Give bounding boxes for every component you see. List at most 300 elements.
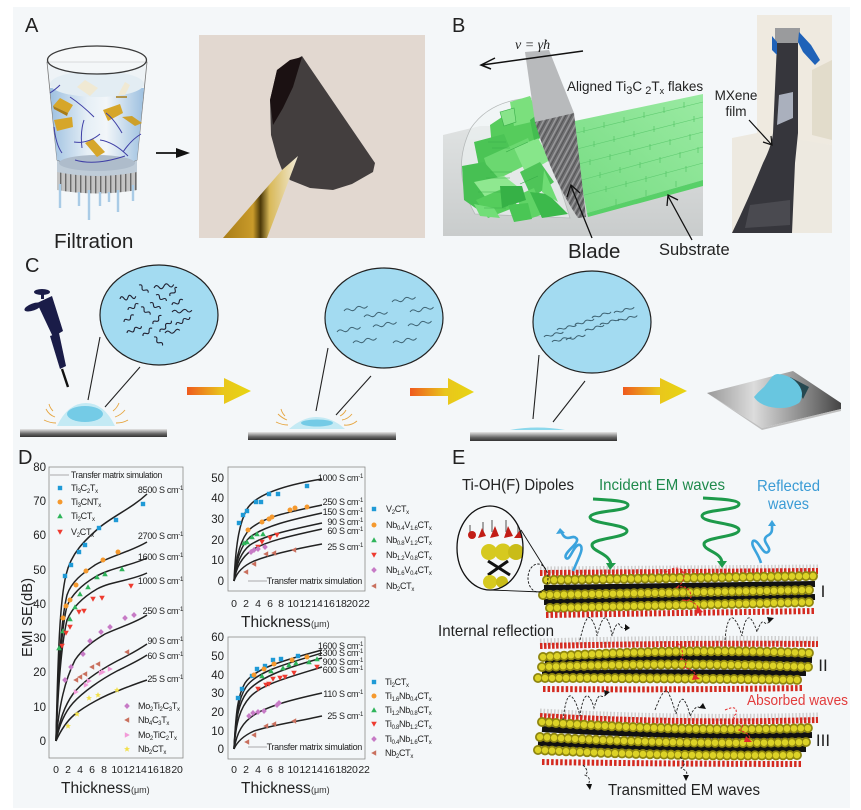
- y axis ticks: 20: [211, 707, 224, 719]
- legend: x: [429, 711, 432, 717]
- legend: V: [404, 535, 410, 545]
- legend: 0.8: [392, 725, 400, 731]
- blue reflected wave left: [556, 528, 582, 571]
- legend: 1.6: [410, 740, 418, 746]
- green substrate sheet: [570, 94, 703, 217]
- label: aligned flakes: x: [660, 86, 665, 96]
- legend: 0.4: [410, 697, 418, 703]
- y axis ticks: 50: [211, 651, 224, 663]
- legend: Ti: [385, 705, 392, 715]
- y axis ticks: [211, 632, 224, 756]
- curve labels: 8500 S cm: [138, 485, 178, 495]
- legend: 0.4: [410, 571, 418, 577]
- legend bottom: x: [177, 707, 180, 713]
- arrow 3: [623, 378, 687, 404]
- legend: 1.2: [397, 556, 405, 562]
- legend top: CT: [80, 527, 92, 537]
- chart: EMI SE vs thickness 2: [211, 467, 432, 631]
- chart: EMI SE vs thickness 1: [19, 462, 184, 797]
- legend bottom: C: [163, 701, 170, 711]
- label: internal reflection: Internal reflection: [438, 623, 554, 640]
- curve labels: -1: [178, 652, 184, 658]
- curve labels: 250 S cm: [323, 497, 358, 507]
- legend top: 2: [77, 533, 81, 539]
- x axis ticks: 14: [311, 764, 323, 776]
- curve labels: -1: [358, 649, 364, 655]
- x axis ticks: 2: [65, 764, 71, 776]
- label: absorbed waves: Absorbed waves: [747, 693, 848, 709]
- layer numerals: I: [821, 582, 825, 601]
- x axis ticks: 2: [243, 598, 249, 610]
- substrate and droplet 2: [248, 348, 396, 440]
- curve labels: -1: [178, 675, 184, 681]
- legend: 2: [392, 510, 396, 516]
- photo: MXene film roll: [732, 15, 832, 233]
- legend: x: [406, 510, 409, 516]
- blade: [525, 50, 574, 122]
- x axis ticks: 16: [323, 598, 335, 610]
- legend bottom: 2: [150, 736, 154, 742]
- x axis ticks: 20: [346, 764, 358, 776]
- x axis ticks: 4: [255, 764, 261, 776]
- legend bottom: 2: [149, 750, 153, 756]
- legend: 1.6: [410, 526, 418, 532]
- legend top: x: [95, 489, 98, 495]
- legend top: Transfer matrix simulation: [71, 470, 162, 480]
- y axis ticks: 50: [211, 473, 224, 485]
- diagram: blade coating: [443, 38, 703, 236]
- transmitted wave arrows: [583, 757, 689, 790]
- curve labels: [138, 485, 184, 684]
- legend: CT: [399, 748, 411, 758]
- curve labels: -1: [358, 690, 364, 696]
- curve labels: -1: [358, 658, 364, 664]
- legend top: CT: [81, 511, 93, 521]
- legend top: CNT: [81, 497, 99, 507]
- label: Substrate with arrow: [659, 195, 730, 259]
- curve labels: 25 S cm: [327, 542, 358, 552]
- curve labels: -1: [358, 543, 364, 549]
- magnified circle 1: [100, 265, 218, 365]
- data markers: [56, 502, 145, 729]
- x axis title: Thickness: [241, 614, 311, 631]
- green incident wave 1: [590, 499, 628, 570]
- legend: 1.2: [410, 725, 418, 731]
- legend: x: [429, 556, 432, 562]
- legend: 1.6: [392, 697, 400, 703]
- legend top: x: [92, 517, 95, 523]
- legend: 0.4: [392, 740, 400, 746]
- green flakes: [462, 96, 568, 222]
- x axis ticks: 12: [123, 764, 135, 776]
- curve labels: -1: [358, 518, 364, 524]
- green incident wave 2: [702, 498, 739, 568]
- curve labels: -1: [178, 532, 184, 538]
- curve labels: 1000 S cm: [318, 473, 358, 483]
- legend: Nb: [399, 705, 410, 715]
- legend: x: [429, 541, 432, 547]
- legend: x: [406, 683, 409, 689]
- x axis ticks: 2: [243, 764, 249, 776]
- legend: Ti: [385, 691, 392, 701]
- legend top: C: [81, 483, 88, 493]
- y axis ticks: 40: [211, 670, 224, 682]
- label: MXene film: film: [726, 104, 746, 119]
- label: reflected waves: [757, 478, 820, 513]
- legend: Nb: [399, 691, 410, 701]
- curve labels: 150 S cm: [323, 507, 358, 517]
- label: aligned flakes: flakes: [664, 79, 703, 94]
- x axis ticks: 4: [77, 764, 83, 776]
- magnified dipoles: [457, 506, 524, 590]
- legend: 0.8: [410, 556, 418, 562]
- legend: CT: [417, 734, 430, 744]
- legend: CT: [418, 550, 430, 560]
- legend: [371, 677, 432, 760]
- y axis ticks: 30: [33, 633, 46, 645]
- x axis ticks: 22: [358, 598, 370, 610]
- legend bottom: CT: [152, 744, 164, 754]
- panel: D charts: [18, 447, 432, 797]
- x axis ticks: 18: [335, 598, 347, 610]
- legend: Nb: [399, 734, 410, 744]
- legend: 0.8: [410, 711, 418, 717]
- legend top: 3: [78, 503, 82, 509]
- heading: A: A: [25, 15, 39, 37]
- heading: E: E: [452, 447, 465, 469]
- legend: CT: [418, 535, 430, 545]
- label: aligned flakes: T: [651, 79, 660, 94]
- legend: 0.4: [397, 526, 405, 532]
- legend: x: [429, 740, 432, 746]
- curve labels: 2700 S cm: [138, 531, 178, 541]
- legend: 2: [397, 587, 401, 593]
- legend: x: [429, 697, 432, 703]
- label: reflected waves: Reflected: [757, 478, 820, 495]
- legend: CT: [418, 520, 430, 530]
- legend: Nb: [385, 748, 396, 758]
- curve labels: 90 S cm: [147, 636, 178, 646]
- legend top: 3: [78, 489, 82, 495]
- legend: CT: [395, 677, 407, 687]
- y axis ticks: 40: [33, 599, 46, 611]
- layer numerals: II: [818, 656, 828, 675]
- curve labels: 25 S cm: [147, 674, 178, 684]
- glass dome: [461, 98, 570, 218]
- curves: [234, 650, 322, 749]
- legend top: 2: [87, 489, 91, 495]
- x axis ticks: [231, 598, 370, 610]
- panel: C drop casting: [20, 255, 841, 441]
- substrate and droplet 1: [20, 337, 167, 437]
- curve labels: 250 S cm: [143, 606, 178, 616]
- x axis title: (μm): [311, 619, 330, 629]
- curve labels: [248, 641, 364, 752]
- x axis ticks: 0: [231, 598, 237, 610]
- legend bottom: Nb: [138, 715, 149, 725]
- curve labels: Transfer matrix simulation: [267, 742, 362, 752]
- label: transmitted waves: Transmitted EM waves: [608, 782, 760, 799]
- legend: Nb: [386, 565, 397, 575]
- legend bottom: C: [152, 715, 159, 725]
- x axis ticks: 6: [267, 764, 273, 776]
- legend: x: [429, 725, 432, 731]
- y axis ticks: [33, 462, 46, 748]
- legend: 0.8: [397, 541, 405, 547]
- legend: Nb: [399, 719, 410, 729]
- x axis ticks: 8: [278, 598, 284, 610]
- legend top: Ti: [71, 511, 78, 521]
- y axis ticks: 10: [33, 702, 46, 714]
- dashed origin circle and callout lines: [490, 530, 548, 592]
- x axis ticks: 10: [287, 764, 299, 776]
- x axis ticks: 0: [53, 764, 59, 776]
- legend bottom: 2: [150, 707, 154, 713]
- panel: B blade coating: [443, 15, 832, 263]
- legend: V: [404, 520, 410, 530]
- legend bottom: TiC: [153, 730, 167, 740]
- heading: D: D: [18, 447, 32, 469]
- arrow 1: [187, 378, 251, 404]
- x axis ticks: 14: [311, 598, 323, 610]
- y axis ticks: 10: [211, 726, 224, 738]
- equation: v = γ̇h: [515, 38, 550, 53]
- legend: Nb: [386, 550, 397, 560]
- layer numerals: III: [816, 731, 830, 750]
- curve labels: [248, 473, 364, 586]
- arrow: blade velocity: [481, 51, 583, 69]
- legend: V: [386, 504, 392, 514]
- heading: B: B: [452, 15, 465, 37]
- x axis ticks: 8: [278, 764, 284, 776]
- x axis title: (μm): [311, 785, 330, 795]
- x axis ticks: 0: [231, 764, 237, 776]
- curve labels: 600 S cm: [323, 665, 358, 675]
- substrate and thin film: [470, 355, 617, 441]
- layer I: [540, 568, 818, 615]
- x axis ticks: [53, 764, 183, 776]
- dashed internal reflection waves: [563, 617, 774, 720]
- curve labels: 60 S cm: [327, 526, 358, 536]
- x axis title: Thickness: [61, 780, 131, 797]
- legend: 1.2: [392, 711, 400, 717]
- curve labels: -1: [358, 498, 364, 504]
- x axis ticks: 12: [299, 764, 311, 776]
- y axis ticks: 30: [211, 514, 224, 526]
- curve labels: 900 S cm: [323, 657, 358, 667]
- x axis ticks: 18: [335, 764, 347, 776]
- legend: Ti: [385, 719, 392, 729]
- curve labels: -1: [358, 527, 364, 533]
- label: incident waves: Incident EM waves: [599, 477, 725, 494]
- x axis ticks: 6: [89, 764, 95, 776]
- x axis ticks: 14: [135, 764, 147, 776]
- curves: [56, 494, 147, 741]
- label: Substrate with arrow: Substrate: [659, 241, 730, 259]
- icon: film on plate: [707, 371, 841, 430]
- legend bottom: [124, 701, 180, 756]
- curves: [234, 479, 322, 581]
- x axis ticks: 18: [159, 764, 171, 776]
- x axis title: Thickness: [241, 780, 311, 797]
- icon: filtration beaker: [47, 46, 147, 220]
- label: reflected waves: waves: [767, 496, 809, 513]
- legend bottom: T: [161, 715, 167, 725]
- curve labels: -1: [178, 577, 184, 583]
- layer III: [538, 712, 818, 764]
- legend: 2: [396, 754, 400, 760]
- legend bottom: Ti: [153, 701, 160, 711]
- legend: CT: [417, 719, 430, 729]
- legend top: Ti: [71, 483, 78, 493]
- legend: Nb: [386, 581, 397, 591]
- legend top: x: [98, 503, 101, 509]
- panel: E shielding mechanism: [438, 447, 848, 799]
- curve labels: 1300 S cm: [318, 648, 358, 658]
- x axis ticks: 10: [111, 764, 123, 776]
- legend bottom: Mo: [138, 701, 150, 711]
- legend: Nb: [386, 535, 397, 545]
- x axis ticks: 20: [171, 764, 183, 776]
- x axis ticks: 20: [346, 598, 358, 610]
- legend: Nb: [386, 520, 397, 530]
- legend top: T: [90, 483, 96, 493]
- x axis ticks: 6: [267, 598, 273, 610]
- legend bottom: 3: [169, 707, 173, 713]
- x axis ticks: 10: [287, 598, 299, 610]
- legend bottom: 3: [158, 721, 162, 727]
- legend: 1.2: [410, 541, 418, 547]
- legend top: [50, 470, 162, 539]
- legend: CT: [418, 565, 430, 575]
- legend top: x: [91, 533, 94, 539]
- label: Blade with arrow: [567, 185, 620, 263]
- chart: EMI SE vs thickness 3: [211, 632, 432, 797]
- legend top: 2: [78, 517, 82, 523]
- curve labels: -1: [358, 712, 364, 718]
- x axis ticks: 16: [323, 764, 335, 776]
- curve labels: 60 S cm: [147, 651, 178, 661]
- curve labels: 90 S cm: [327, 517, 358, 527]
- legend bottom: 4: [149, 721, 153, 727]
- legend bottom: 2: [166, 736, 170, 742]
- x axis ticks: 4: [255, 598, 261, 610]
- legend: CT: [400, 581, 412, 591]
- y axis ticks: 0: [218, 576, 224, 588]
- arrow: beaker to film: [156, 148, 190, 158]
- legend top: Ti: [71, 497, 78, 507]
- magnified circle 3: [533, 271, 651, 373]
- curve labels: 1000 S cm: [138, 576, 178, 586]
- icon: pipette: [23, 289, 68, 387]
- x axis ticks: [231, 764, 370, 776]
- legend bottom: x: [166, 721, 169, 727]
- label: Blade with arrow: Blade: [568, 240, 620, 263]
- label: MXene film: MXene: [715, 88, 757, 103]
- legend bottom: 2: [160, 707, 164, 713]
- y axis ticks: 0: [218, 744, 224, 756]
- y axis ticks: 70: [33, 496, 46, 508]
- curve labels: -1: [178, 637, 184, 643]
- curve labels: -1: [358, 666, 364, 672]
- caption: Filtration: Filtration: [54, 230, 133, 253]
- legend: x: [429, 526, 432, 532]
- y axis ticks: 80: [33, 462, 46, 474]
- layer II: [538, 639, 818, 689]
- label: aligned flakes: Aligned Ti: [567, 79, 626, 94]
- y axis ticks: 60: [211, 632, 224, 644]
- legend top: V: [71, 527, 77, 537]
- curve labels: -1: [358, 474, 364, 480]
- legend bottom: Nb: [138, 744, 149, 754]
- label: dipoles: Ti-OH(F) Dipoles: [462, 477, 574, 494]
- legend: [371, 504, 432, 593]
- legend: V: [404, 565, 410, 575]
- x axis ticks: 16: [147, 764, 159, 776]
- legend bottom: Mo: [138, 730, 150, 740]
- legend: CT: [417, 705, 430, 715]
- y axis ticks: 0: [40, 736, 46, 748]
- legend bottom: x: [174, 736, 177, 742]
- y axis ticks: [211, 473, 224, 588]
- label: aligned flakes: C: [632, 79, 642, 94]
- legend: CT: [417, 691, 430, 701]
- y axis ticks: 20: [33, 667, 46, 679]
- legend: V: [404, 550, 410, 560]
- y axis ticks: 30: [211, 688, 224, 700]
- curve labels: 1600 S cm: [138, 552, 178, 562]
- legend: Ti: [385, 734, 392, 744]
- legend bottom: T: [172, 701, 178, 711]
- curve labels: 110 S cm: [323, 689, 358, 699]
- arrow 2: [410, 378, 474, 405]
- curve labels: -1: [178, 607, 184, 613]
- legend bottom: x: [163, 750, 166, 756]
- curve labels: -1: [358, 642, 364, 648]
- x axis ticks: 22: [358, 764, 370, 776]
- x axis ticks: 12: [299, 598, 311, 610]
- label: aligned flakes: 2: [642, 85, 651, 97]
- y axis ticks: 40: [211, 493, 224, 505]
- data markers: [236, 654, 320, 745]
- x axis title: (μm): [131, 785, 150, 795]
- data markers: [237, 484, 310, 575]
- legend bottom: T: [169, 730, 175, 740]
- magnified circle 2: [325, 268, 443, 368]
- y axis ticks: 10: [211, 555, 224, 567]
- legend: 2: [392, 683, 396, 689]
- curve labels: 25 S cm: [327, 711, 358, 721]
- photo: film in tweezers: [199, 35, 425, 238]
- legend: x: [429, 571, 432, 577]
- curve labels: -1: [358, 508, 364, 514]
- legend: 1.6: [397, 571, 405, 577]
- legend: x: [411, 587, 414, 593]
- label: aligned flakes: 3: [626, 85, 632, 97]
- legend: Ti: [385, 677, 392, 687]
- x axis ticks: 8: [101, 764, 107, 776]
- y axis ticks: 60: [33, 530, 46, 542]
- y axis ticks: 20: [211, 535, 224, 547]
- red absorbed wave paths: [665, 568, 752, 742]
- heading: C: C: [25, 255, 39, 277]
- blue reflected wave right: [752, 520, 776, 563]
- curve labels: 1600 S cm: [318, 641, 358, 651]
- label: MXene film: [715, 88, 772, 145]
- curve labels: Transfer matrix simulation: [267, 576, 362, 586]
- y axis title: EMI SE(dB): [19, 578, 36, 657]
- curve labels: -1: [178, 486, 184, 492]
